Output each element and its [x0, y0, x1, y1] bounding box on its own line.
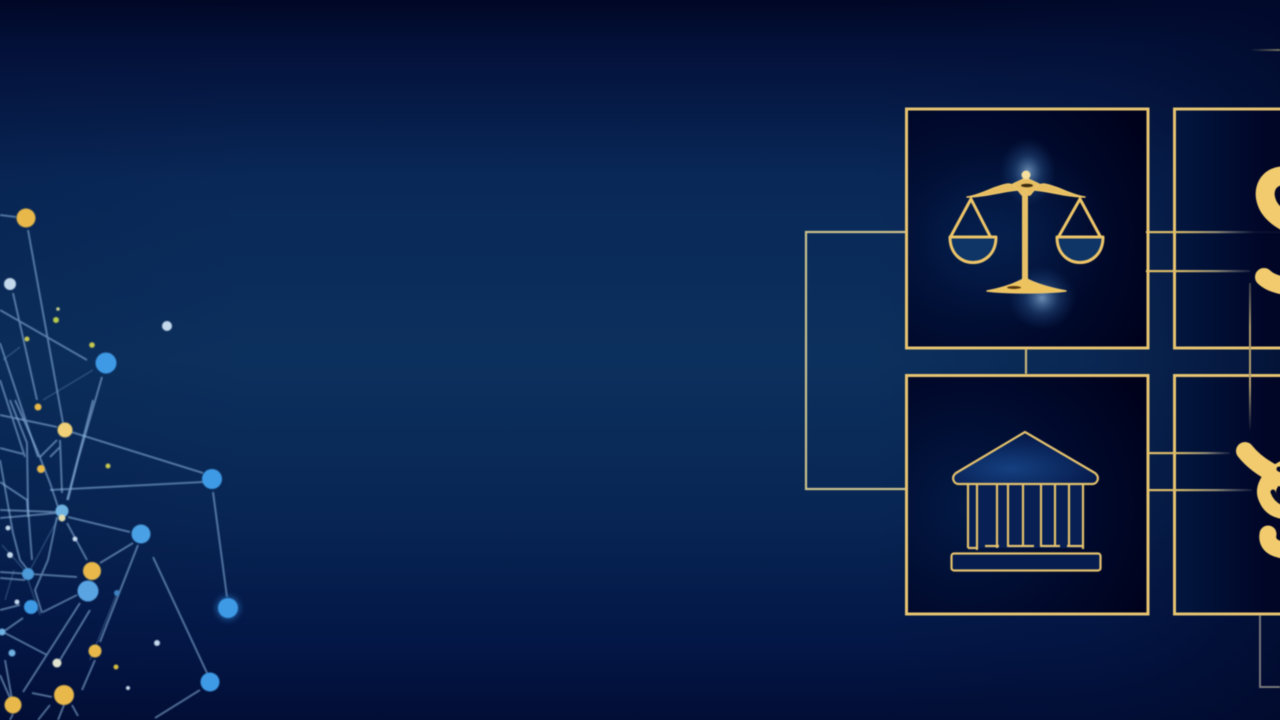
- network lines: [0, 215, 227, 720]
- network graph: left constellation: [0, 208, 240, 720]
- connectors: crossing into right panels: [1146, 231, 1280, 491]
- connector: upper rungs: [1146, 231, 1280, 272]
- connector: lower rungs: [1148, 452, 1252, 491]
- blue nodes: [0, 352, 240, 692]
- connector: bottom right elbow: [1260, 615, 1280, 687]
- connector: top right stub: [1250, 49, 1280, 51]
- faint lines: [2, 347, 117, 660]
- icon: scales: [950, 170, 1103, 293]
- pale nodes: [4, 278, 172, 690]
- connector: left bracket: [806, 232, 906, 489]
- icon glow: [920, 138, 1110, 330]
- icon: dollar sign lower fragment: [1245, 451, 1280, 551]
- panel: scales of justice: [906, 109, 1148, 348]
- connector: vertical between left panels: [1025, 349, 1027, 374]
- gold nodes: [4, 208, 118, 714]
- panel: top right with dollar sign: [1174, 109, 1280, 348]
- panel: bottom right with dollar sign: [1174, 376, 1280, 614]
- connector: vertical in right panels: [1249, 283, 1251, 430]
- panel: bottom left temple: [906, 376, 1148, 614]
- icon: dollar sign upper fragment: [1264, 176, 1280, 287]
- icon: temple: [952, 432, 1100, 570]
- panel: connector lines: [806, 49, 1280, 687]
